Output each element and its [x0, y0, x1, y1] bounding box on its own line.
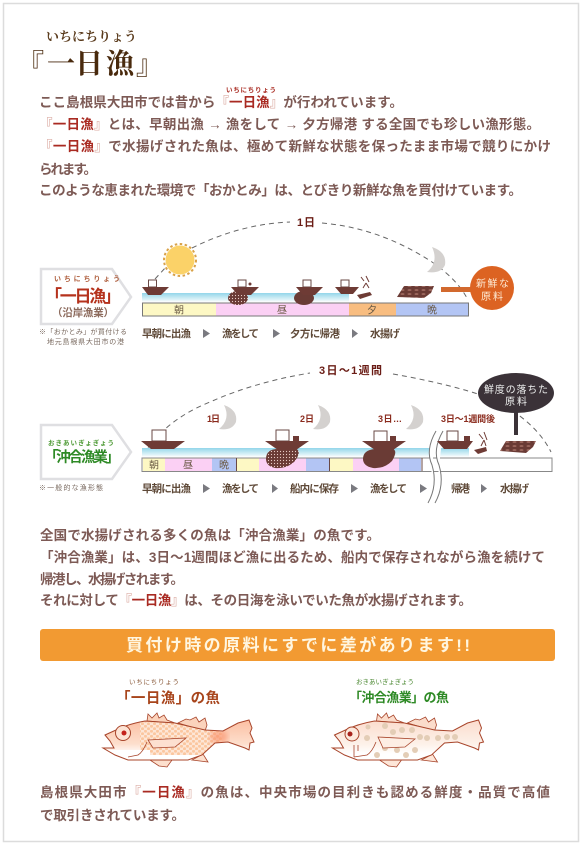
steps row: 早朝に出漁 [142, 482, 192, 495]
boat with net [228, 280, 259, 305]
comparison paragraph: 帰港し、水揚げされます。 [40, 571, 184, 587]
time bar: 晩 [427, 304, 437, 316]
steps row: 早朝に出漁 [142, 327, 192, 340]
steps row [142, 482, 530, 495]
duration: 1日: 1日 [297, 216, 315, 229]
icon: fish crates [397, 286, 434, 298]
time bar: 晩 [219, 460, 229, 472]
steps row: 漁をして [222, 327, 259, 340]
intro paragraph: られます。 [39, 162, 97, 177]
callout: 新鮮な原料 [470, 266, 514, 310]
boat with net: day 3 [362, 431, 406, 468]
steps row: 夕方に帰港 [290, 327, 340, 340]
day 3 marker [378, 405, 423, 429]
steps row: 漁をして [370, 482, 407, 495]
fish: stale 沖合漁業 [332, 713, 484, 767]
closing paragraph: 島根県大田市『一日漁』の魚は、中央市場の目利きも認める鮮度・品質で高値 [40, 784, 550, 800]
heading: 沖合漁業の魚 [349, 677, 449, 705]
callout: 新鮮な原料: 新鮮な [476, 277, 509, 290]
intro paragraph: 『一日漁』とは、早朝出漁 → 漁をして → 夕方帰港 する全国でも珍しい漁形態。 [39, 116, 540, 132]
time bar: 昼 [183, 460, 193, 472]
heading: 一日漁の魚: いちにちりょう [129, 678, 179, 686]
comparison paragraph: それに対して『一日漁』は、その日海を泳いでいた魚が水揚げされます。 [40, 592, 472, 608]
note: おかとみ: 地元島根県大田市の港 [47, 337, 124, 346]
day 1 marker: 1日 [207, 414, 220, 424]
note: おかとみ: ※「おかとみ」が買付ける [39, 327, 127, 336]
heading: 一日漁の魚 [116, 678, 220, 707]
intro paragraph: このような恵まれた環境で「おかとみ」は、とびきり新鮮な魚を買付けています。 [39, 182, 522, 198]
banner: 買付け時の原料にすでに差があります!! [126, 635, 470, 655]
time bar [142, 303, 468, 316]
fish: fresh 一日漁 [100, 713, 254, 767]
comparison paragraph [40, 527, 545, 608]
diagram: 一日漁 [39, 216, 514, 346]
boat: return [335, 280, 359, 294]
break mark [428, 431, 443, 503]
steps row: 船内に保存 [290, 482, 340, 495]
day 2 marker [300, 405, 330, 429]
title: 一日漁 [16, 26, 164, 83]
note: おかとみ [39, 327, 127, 346]
steps row: 水揚げ [500, 482, 530, 495]
steps row: 水揚げ [370, 327, 400, 340]
boat with net: day 2 [265, 430, 309, 468]
label: 3日〜1週間後: 3日〜1週間後 [441, 413, 495, 424]
icon: landing crate [357, 276, 372, 299]
heading: 一日漁の魚: 「一日漁」の魚 [116, 689, 220, 707]
day 2 marker: 2日 [300, 414, 314, 424]
callout: 鮮度の落ちた原料: 鮮度の落ちた [484, 383, 548, 396]
comparison paragraph: 全国で水揚げされる多くの魚は「沖合漁業」の魚です。 [40, 527, 380, 543]
steps row: 漁をして [222, 482, 259, 495]
icon: sun [164, 244, 196, 276]
comparison paragraph: 「沖合漁業」は、3日〜1週間ほど漁に出るため、船内で保存されながら漁を続けて [40, 549, 545, 565]
connector bar [441, 287, 473, 292]
time bar: 朝 [149, 460, 159, 472]
sea band [142, 448, 469, 457]
intro paragraph [39, 85, 551, 198]
day 1 marker [207, 405, 236, 429]
label box: 一日漁 沿岸漁業: 「一日漁」 [45, 287, 121, 306]
title: 一日漁: 漁 [106, 42, 136, 82]
heading: 沖合漁業の魚: 「沖合漁業」の魚 [349, 690, 449, 705]
banner [40, 629, 555, 661]
arc: 3日〜1週間 [143, 373, 551, 455]
intro paragraph: 『一日漁』で水揚げされた魚は、極めて新鮮な状態を保ったまま市場で競りにかけ [39, 138, 551, 154]
title: 一日漁: いちにちりょう [46, 26, 137, 45]
duration: 3日〜1週間: 3日〜1週間 [319, 363, 382, 377]
icon: moon [427, 247, 445, 272]
title: 一日漁: 』 [136, 43, 164, 83]
label box: 沖合漁業: 「沖合漁業」 [44, 448, 120, 466]
sea band [142, 293, 349, 302]
boat: departure [142, 280, 169, 295]
steps row: 帰港 [451, 482, 470, 495]
title: 一日漁: 一 [47, 42, 75, 82]
time bar [142, 458, 552, 472]
intro paragraph: いちにちりょう [226, 85, 276, 94]
boat: return [437, 431, 473, 449]
diagram: 沖合漁業 [39, 363, 554, 503]
callout: 鮮度の落ちた原料 [478, 373, 554, 435]
icon: fish crates [500, 441, 536, 453]
title: 一日漁: 日 [75, 42, 103, 82]
day 3 marker: 3日… [378, 414, 402, 424]
boat with full net [294, 280, 323, 305]
steps row [142, 327, 400, 340]
icon: landing crate [474, 432, 487, 454]
label box: 沖合漁業: おきあいぎょぎょう [48, 438, 114, 447]
note: 一般的な漁形態: ※一般的な漁形態 [39, 483, 103, 492]
label box: 一日漁 沿岸漁業: いちにちりょう [54, 274, 120, 283]
title: 一日漁: 『 [16, 43, 44, 83]
arc: 1日 [155, 222, 468, 300]
label box: 一日漁 沿岸漁業 [41, 269, 131, 324]
intro paragraph: ここ島根県大田市では昔から『一日漁』が行われています。 [39, 94, 403, 110]
closing paragraph [40, 784, 550, 823]
callout: 新鮮な原料: 原料 [481, 290, 503, 303]
heading: 沖合漁業の魚: おきあいぎょぎょう [356, 677, 414, 686]
time bar: 夕 [367, 304, 377, 316]
time bar: 昼 [277, 304, 287, 316]
time bar: 朝 [174, 304, 184, 316]
label box: 沖合漁業 [41, 425, 131, 479]
boat: departure [141, 430, 185, 449]
label box: 一日漁 沿岸漁業: （沿岸漁業） [52, 306, 114, 319]
closing paragraph: で取引きされています。 [40, 808, 185, 823]
callout: 鮮度の落ちた原料: 原料 [505, 395, 527, 408]
